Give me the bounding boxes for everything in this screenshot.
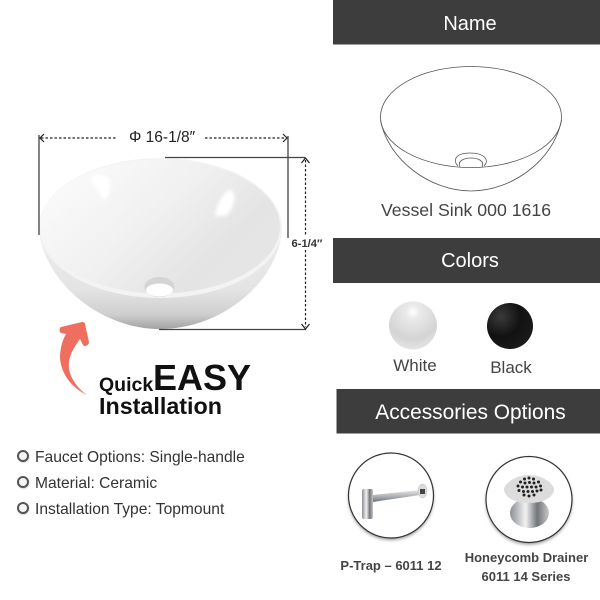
feature: material: Material: Ceramic bbox=[35, 475, 157, 492]
color swatch: white bbox=[389, 302, 437, 375]
icon: sink line drawing bbox=[380, 66, 562, 191]
panel: name header bbox=[333, 0, 600, 44]
color swatch: black bbox=[487, 303, 533, 377]
icon: red curved arrow bbox=[60, 322, 89, 395]
accessory: p-trap: P-Trap – 6011 12 bbox=[340, 558, 442, 573]
panel: accessories header bbox=[336, 389, 600, 434]
sink photo bbox=[39, 158, 282, 329]
heading: quick easy installation: Installation bbox=[99, 393, 222, 419]
sink name: Vessel Sink 000 1616 bbox=[381, 200, 551, 220]
accessory: honeycomb drainer: Honeycomb Drainer bbox=[465, 550, 588, 565]
panel: accessories header: Accessories Options bbox=[375, 401, 566, 424]
heading: quick easy installation: EASY bbox=[153, 357, 251, 398]
panel: colors header bbox=[333, 238, 600, 283]
accessory: p-trap bbox=[340, 453, 442, 573]
color swatch: white: White bbox=[393, 356, 437, 375]
feature: installation type: Installation Type: Topmount bbox=[35, 501, 225, 518]
dimension: diameter: Φ 16-1/8″ bbox=[129, 129, 196, 146]
dimension: diameter bbox=[39, 129, 288, 238]
heading: quick easy installation bbox=[99, 357, 251, 419]
panel: colors header: Colors bbox=[441, 250, 499, 272]
feature: faucet options: Faucet Options: Single-handle bbox=[35, 449, 245, 466]
heading: quick easy installation: Quick bbox=[99, 374, 153, 396]
dimension: height: 6-1/4″ bbox=[292, 238, 323, 250]
panel: name header: Name bbox=[443, 13, 497, 35]
feature list bbox=[18, 449, 245, 518]
dimension: height bbox=[159, 158, 324, 330]
color swatch: black: Black bbox=[490, 358, 532, 377]
accessory: honeycomb drainer bbox=[465, 456, 588, 584]
accessory: honeycomb drainer: 6011 14 Series bbox=[482, 569, 570, 584]
